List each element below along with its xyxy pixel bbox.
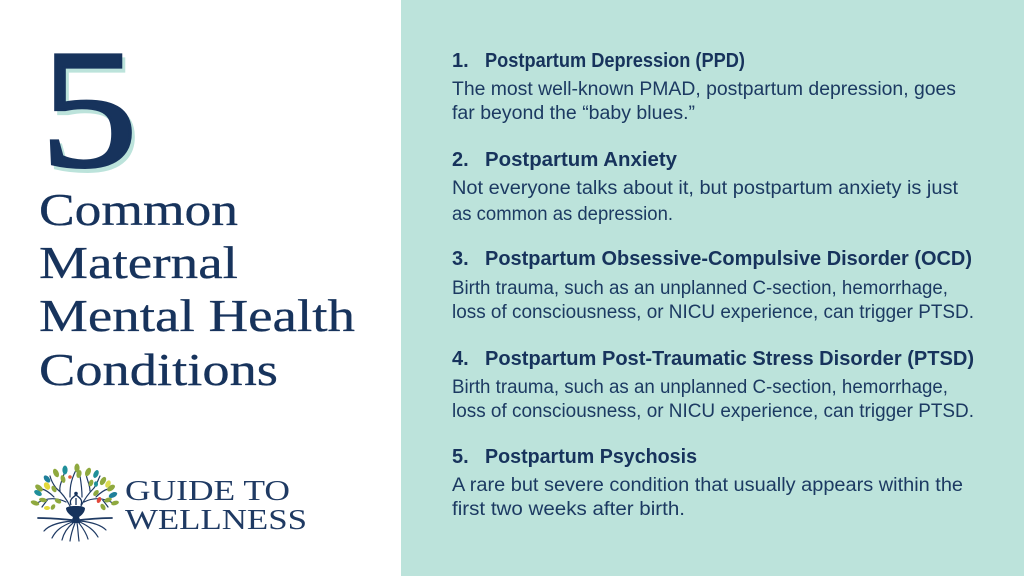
item 1: postpartum depression: The most well-known PMAD, postpartum depression, goes <box>452 79 956 100</box>
title: Maternal <box>39 237 238 288</box>
big number 5 with mint shadow: 5 <box>43 19 141 207</box>
item 5: postpartum psychosis: 5. <box>452 446 469 468</box>
item 2: postpartum anxiety: Postpartum Anxiety <box>485 149 678 171</box>
item 3: postpartum OCD: Birth trauma, such as an unplanned C-section, hemorrhage, <box>452 278 948 299</box>
item 5: postpartum psychosis: first two weeks after birth. <box>452 499 685 520</box>
logo wordmark: WELLNESS <box>125 504 307 536</box>
item 3: postpartum OCD: loss of consciousness, or NICU experience, can trigger PTSD. <box>452 302 974 323</box>
item 3: postpartum OCD <box>452 248 974 323</box>
item 3: postpartum OCD: Postpartum Obsessive-Compulsive Disorder (OCD) <box>485 248 972 270</box>
item 3: postpartum OCD: 3. <box>452 248 469 270</box>
item 4: postpartum PTSD: Postpartum Post-Traumatic Stress Disorder (PTSD) <box>485 348 974 370</box>
item 2: postpartum anxiety: 2. <box>452 149 469 171</box>
item 5: postpartum psychosis: A rare but severe condition that usually appears within the <box>452 475 963 496</box>
title: Mental Health <box>39 290 355 341</box>
item 1: postpartum depression: 1. <box>452 50 469 72</box>
item 2: postpartum anxiety: Not everyone talks about it, but postpartum anxiety is just <box>452 178 959 199</box>
icon: tree with meditating figure <box>30 464 119 541</box>
item 1: postpartum depression <box>452 50 956 124</box>
leaves <box>30 464 119 511</box>
item 4: postpartum PTSD: Birth trauma, such as an unplanned C-section, hemorrhage, <box>452 377 948 398</box>
item 1: postpartum depression: far beyond the “baby blues.” <box>452 103 695 124</box>
item 4: postpartum PTSD <box>452 348 974 422</box>
item 2: postpartum anxiety <box>452 149 959 225</box>
panel: conditions list background <box>401 0 1024 576</box>
logo: Guide to Wellness <box>30 464 307 541</box>
title <box>39 184 355 395</box>
item 5: postpartum psychosis: Postpartum Psychosis <box>485 446 697 468</box>
item 2: postpartum anxiety: as common as depression. <box>452 204 673 225</box>
big number 5 with mint shadow: 5 <box>40 15 138 203</box>
item 5: postpartum psychosis <box>452 446 963 520</box>
meditating figure and roots <box>66 506 85 523</box>
item 4: postpartum PTSD: loss of consciousness, or NICU experience, can trigger PTSD. <box>452 401 974 422</box>
logo wordmark: GUIDE TO <box>125 475 290 507</box>
item 1: postpartum depression: Postpartum Depression (PPD) <box>485 50 745 72</box>
item 4: postpartum PTSD: 4. <box>452 348 469 370</box>
title: Conditions <box>39 344 278 395</box>
logo wordmark <box>125 475 307 536</box>
title: Common <box>39 184 238 235</box>
